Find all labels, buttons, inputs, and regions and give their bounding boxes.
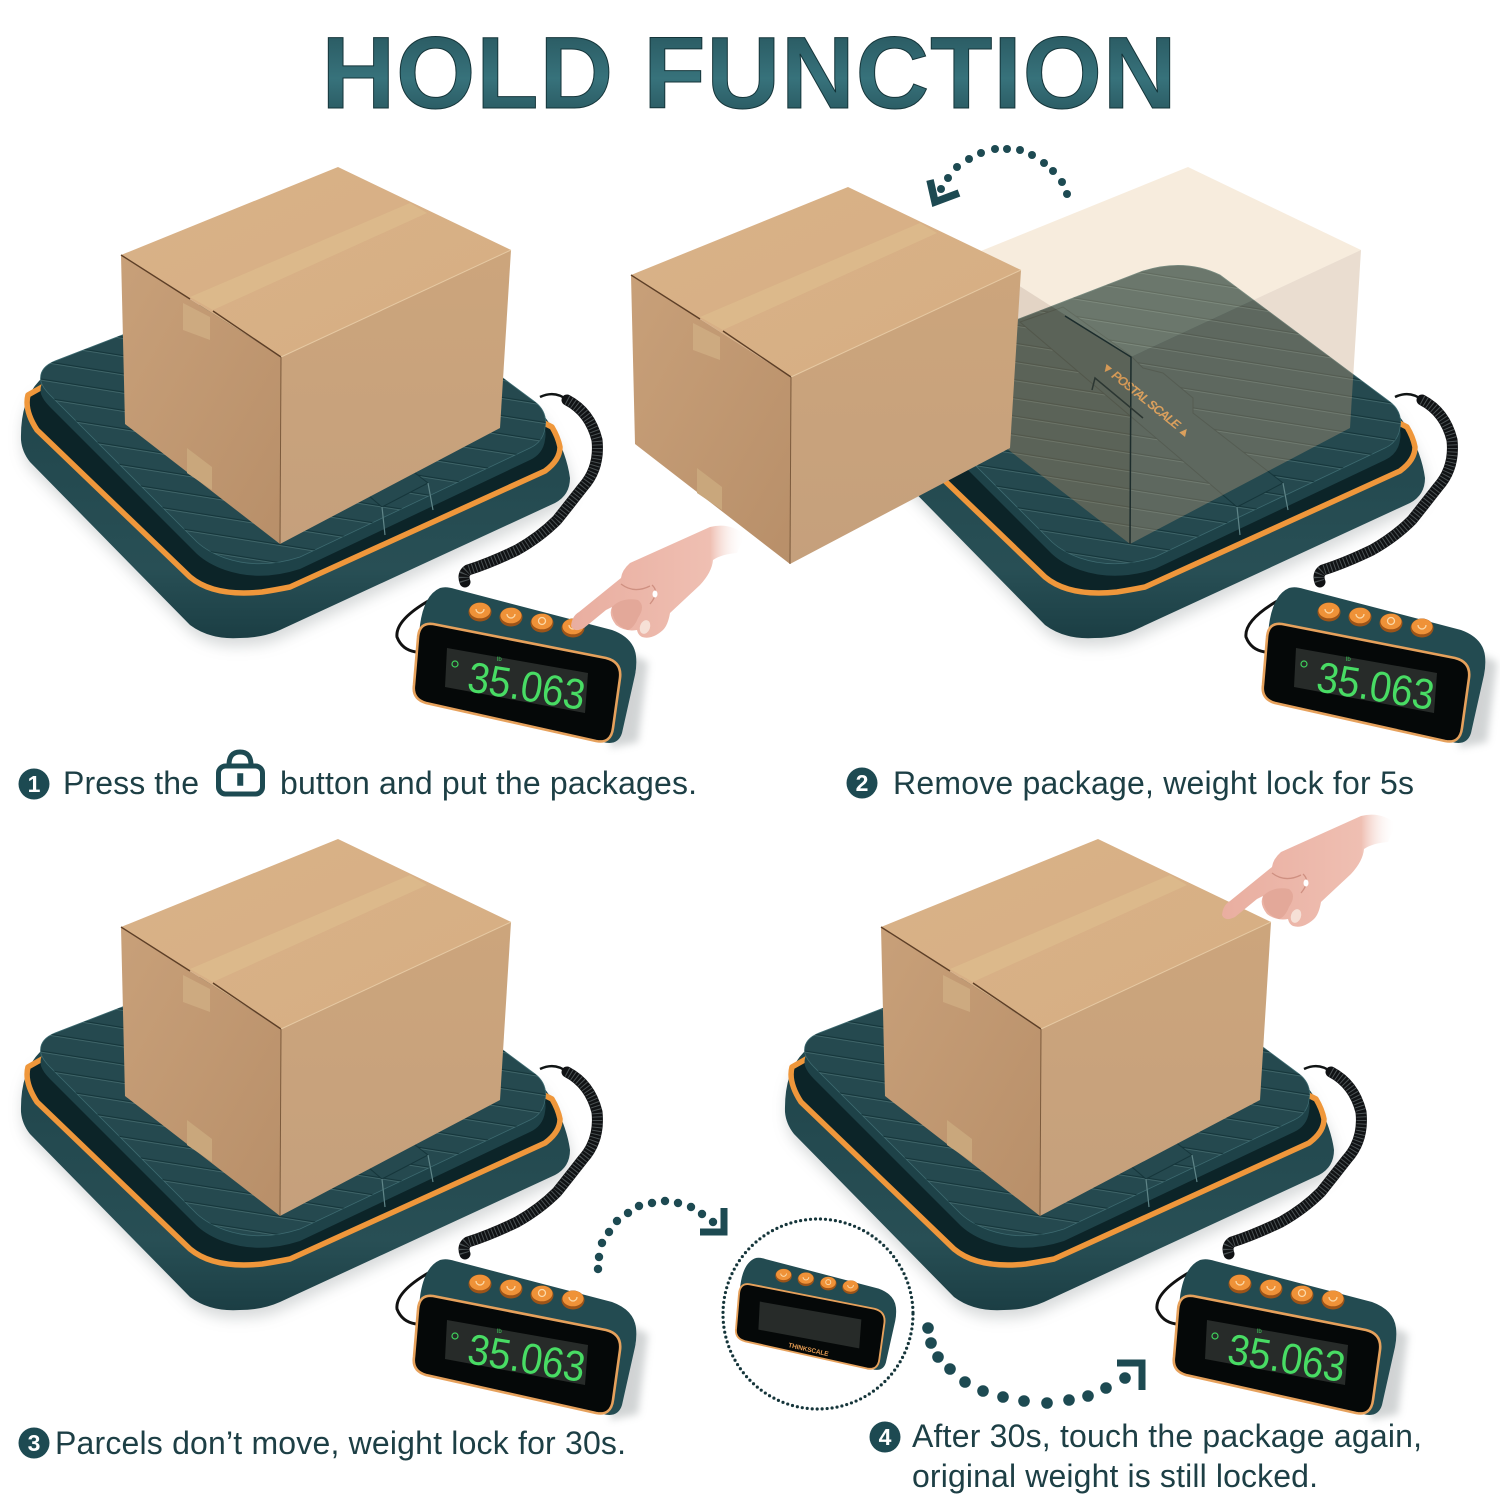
step 1 number badge (18, 768, 50, 800)
step 4 text (912, 1418, 1422, 1494)
panel: step 3 display: lb (497, 1329, 502, 1335)
step 2 text: Remove package, weight lock for 5s (893, 765, 1414, 801)
step 3 number badge (18, 1428, 50, 1458)
panel: step 2 scale (876, 167, 1452, 646)
step 1 number badge: 1 (28, 771, 41, 797)
step 4 text: original weight is still locked. (912, 1458, 1318, 1494)
arrow: to lit display (922, 1322, 1142, 1409)
icon: hand touching package (1222, 815, 1396, 927)
panel: step 2 display: lb (1346, 657, 1351, 663)
display reading: 35.063 (464, 1325, 589, 1392)
panel: step 3 display (397, 1259, 648, 1420)
arrow: package removed (930, 145, 1071, 202)
panel: step 4 display: lb (1257, 1329, 1262, 1335)
icon: package on scale (121, 167, 511, 544)
icon: hand pressing button (571, 526, 745, 638)
arrow: to blank display (594, 1197, 724, 1273)
icon: lock (218, 752, 262, 794)
display reading: 35.063 (1224, 1325, 1349, 1392)
step 4 text: After 30s, touch the package again, (912, 1418, 1422, 1454)
panel: step 3 scale with package (21, 839, 597, 1318)
display reading: 35.063 (464, 653, 589, 720)
display reading: 35.063 (1313, 653, 1438, 720)
icon: package on scale (881, 839, 1271, 1216)
step 1 text: Press the (63, 765, 199, 801)
step 1 text continued: button and put the packages. (280, 765, 697, 801)
scale label: ▼ POSTAL SCALE ▲ (1098, 359, 1194, 441)
panel: step 1 scale with package (21, 167, 597, 646)
panel: step 2 display (1246, 587, 1497, 748)
icon: package on scale (121, 839, 511, 1216)
icon: lifted package (631, 187, 1021, 564)
title: HOLD FUNCTION (322, 16, 1176, 130)
step 4 number badge (870, 1422, 900, 1452)
panel: step 1 display: lb (497, 657, 502, 663)
callout: display off circle (723, 1219, 913, 1409)
step 3 number badge: 3 (28, 1430, 40, 1456)
icon: ghost package (971, 167, 1361, 544)
panel: step 4 display (1157, 1259, 1408, 1420)
step 3 text: Parcels don’t move, weight lock for 30s. (55, 1425, 626, 1461)
step 2 number badge (846, 768, 878, 798)
panel: step 4 scale with package (785, 839, 1361, 1318)
step 2 number badge: 2 (856, 770, 868, 796)
step 4 number badge: 4 (879, 1424, 892, 1450)
panel: step 1 display (397, 587, 648, 748)
brand mark: THINKSCALE (788, 1342, 830, 1358)
